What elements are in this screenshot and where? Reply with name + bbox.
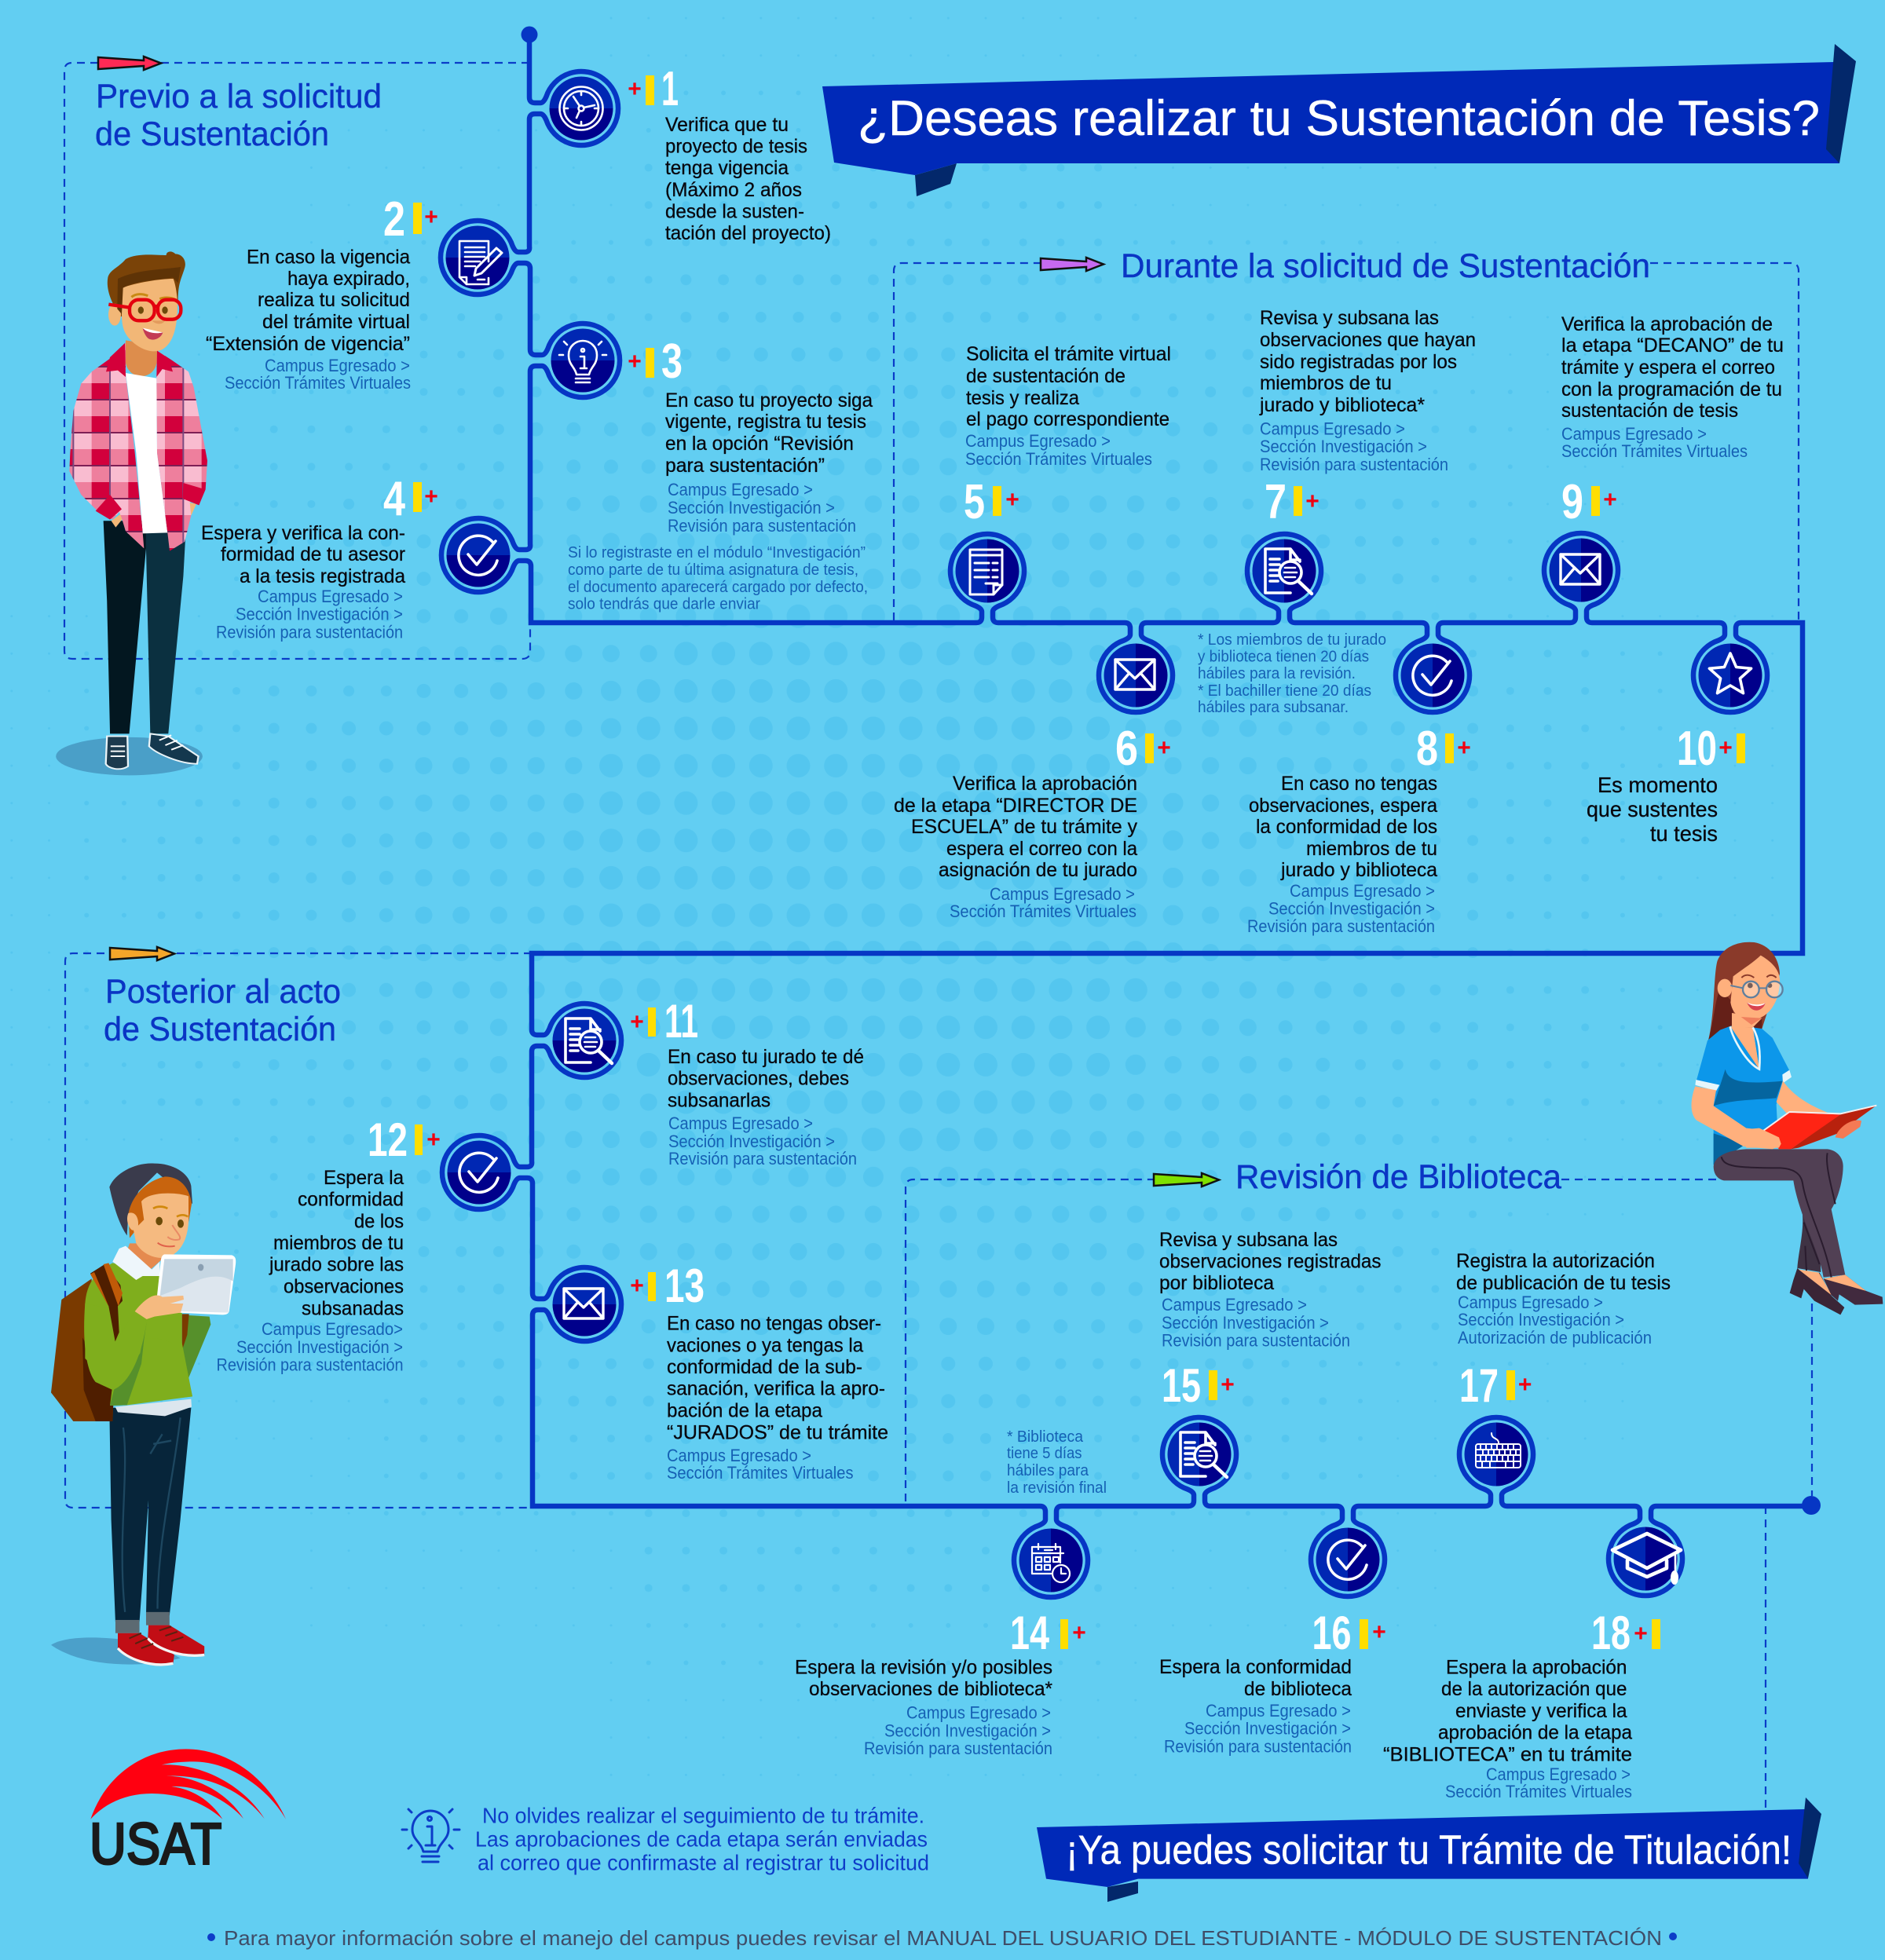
step 11 [553, 995, 864, 1168]
text block: Campus Egresado > [990, 884, 1135, 904]
character: woman reading [1692, 942, 1883, 1315]
reminder text: No olvides realizar el seguimiento de tu trámite. [482, 1803, 924, 1828]
text block: Verifica la aprobación [953, 773, 1137, 795]
text block [1159, 1229, 1381, 1351]
closing banner: ¡Ya puedes solicitar tu Trámite de Titulación! [1066, 1828, 1792, 1874]
number badge: + [1634, 1621, 1648, 1647]
text block: Revisión para sustentación [216, 622, 403, 642]
icon: check [448, 1140, 511, 1205]
note: * El bachiller tiene 20 días [1198, 682, 1371, 700]
icon: clock [550, 77, 613, 140]
arrow: purple [1041, 258, 1104, 271]
text block: Campus Egresado > [1458, 1293, 1603, 1312]
text block: Sección Trámites Virtuales [1445, 1782, 1632, 1801]
note: * Los miembros de tu jurado [1198, 631, 1386, 649]
number badge [628, 62, 679, 116]
icon: graduation cap [1612, 1527, 1681, 1591]
step 7 [1252, 307, 1476, 603]
number badge [1265, 475, 1320, 529]
number badge: 9 [1561, 475, 1583, 529]
text block: En caso no tengas obser- [667, 1313, 881, 1335]
text block: Sección Investigación > [668, 498, 835, 517]
number badge: 2 [383, 192, 405, 247]
title banner [822, 44, 1856, 196]
note: * Biblioteca [1007, 1428, 1084, 1446]
text block: tación del proyecto) [665, 222, 831, 244]
note: tiene 5 días [1007, 1445, 1082, 1462]
text block: Espera y verifica la con- [201, 522, 405, 544]
arrow: green [1154, 1173, 1219, 1187]
text block: Autorización de publicación [1458, 1328, 1652, 1348]
number badge: 7 [1265, 475, 1287, 529]
number badge: + [1305, 488, 1320, 514]
text block: aprobación de la etapa [1438, 1721, 1632, 1743]
text block: miembros de tu [1306, 838, 1437, 860]
note: el documento aparecerá cargado por defecto, [568, 579, 868, 596]
text block: jurado sobre las [269, 1253, 404, 1275]
number badge: 18 [1591, 1607, 1631, 1659]
character: man with tablet [51, 1164, 236, 1665]
number badge: + [630, 1273, 644, 1299]
step 17 [1456, 1250, 1671, 1486]
heading: biblioteca: Revisión de Biblioteca [1235, 1158, 1561, 1196]
text block: realiza tu solicitud [258, 289, 410, 311]
text block: vaciones o ya tengas la [667, 1335, 863, 1357]
number badge: 15 [1162, 1359, 1201, 1412]
number badge: 10 [1677, 722, 1717, 776]
number badge [1010, 1607, 1086, 1659]
text block: Registra la autorización [1456, 1250, 1655, 1272]
text block: desde la susten- [665, 201, 804, 223]
icon: document with magnifier [1167, 1423, 1232, 1486]
note: la revisión final [1007, 1479, 1107, 1497]
reminder text: Las aprobaciones de cada etapa serán enviadas [475, 1827, 928, 1852]
title banner: ¿Deseas realizar tu Sustentación de Tesis? [858, 91, 1820, 146]
text block: Sección Trámites Virtuales [965, 449, 1152, 469]
text block: Sección Investigación > [1162, 1313, 1329, 1333]
text block: bación de la etapa [667, 1399, 822, 1421]
logo: USAT: USAT [90, 1811, 221, 1876]
text block: Campus Egresado > [1290, 881, 1435, 901]
text block: Sección Investigación > [884, 1721, 1051, 1740]
panel: durante dashed frame [894, 263, 1799, 620]
number badge: 8 [1416, 722, 1438, 776]
panel: biblioteca dashed frame [906, 1179, 1812, 1811]
step 12 [217, 1113, 511, 1374]
text block [665, 389, 873, 536]
text block: jurado y biblioteca [1280, 859, 1437, 881]
icon: calendar with clock [1019, 1528, 1082, 1592]
number badge: + [1603, 487, 1617, 513]
text block: la etapa “DECANO” de tu [1561, 335, 1784, 357]
text block: sanación, verifica la apro- [667, 1377, 885, 1399]
step 1 [550, 62, 831, 244]
step 8 [1198, 631, 1471, 936]
text block [206, 247, 411, 393]
number badge: + [424, 484, 438, 510]
number badge: 11 [664, 995, 698, 1048]
text block: Campus Egresado> [262, 1319, 403, 1339]
text block: de la etapa “DIRECTOR DE [894, 795, 1137, 817]
number badge: + [1518, 1372, 1532, 1398]
text block: Campus Egresado > [1561, 424, 1707, 444]
text block: Verifica la aprobación de [1561, 313, 1773, 335]
text block: Revisa y subsana las [1159, 1229, 1338, 1251]
step 3 [551, 328, 873, 612]
text block: Sección Investigación > [668, 1132, 835, 1151]
character: man with plaid shirt [56, 251, 207, 775]
text block: Sección Trámites Virtuales [225, 373, 411, 393]
text block: observaciones que hayan [1260, 329, 1476, 351]
footer note: Para mayor información sobre el manejo del campus puedes revisar el MANUAL DEL USUARIO DEL ESTUDIANTE - MÓDULO DE SUSTENTACIÓN [224, 1926, 1662, 1950]
text block: que sustentes [1587, 797, 1718, 821]
text block: jurado y biblioteca* [1259, 394, 1425, 416]
number badge [1115, 722, 1171, 776]
number badge: + [628, 76, 642, 102]
note: hábiles para [1007, 1462, 1089, 1479]
text block: sido registradas por los [1260, 351, 1457, 373]
text block: la conformidad de los [1256, 816, 1437, 838]
number badge: 17 [1459, 1359, 1499, 1412]
text block: Revisión para sustentación [1247, 916, 1435, 936]
icon: envelope [1104, 644, 1167, 707]
text block: de la autorización que [1441, 1678, 1627, 1700]
text block: formidad de tu asesor [221, 543, 405, 565]
step 16 [1159, 1528, 1386, 1756]
number badge: + [1072, 1620, 1086, 1646]
text block: “Extensión de vigencia” [206, 333, 410, 355]
number badge: 12 [368, 1113, 408, 1166]
text block: Revisión para sustentación [1164, 1737, 1352, 1756]
text block: de sustentación de [966, 365, 1126, 387]
text block [1247, 773, 1437, 936]
text block: Solicita el trámite virtual [966, 343, 1171, 365]
text block: del trámite virtual [262, 311, 410, 333]
text block: Sección Investigación > [1268, 898, 1435, 919]
panel: previo dashed frame [64, 63, 530, 659]
icon: reminder light bulb [402, 1809, 459, 1862]
icon: light bulb [551, 328, 614, 393]
number badge: + [1372, 1619, 1386, 1645]
text block: el pago correspondiente [966, 408, 1169, 430]
step 18 [1383, 1527, 1681, 1801]
heading: previo: de Sustentación [95, 115, 329, 153]
text block: Espera la [324, 1167, 404, 1189]
text block: Revisa y subsana las [1260, 307, 1439, 329]
text block: de los [354, 1211, 404, 1233]
text block: enviaste y verifica la [1455, 1700, 1627, 1722]
text block [668, 1046, 864, 1168]
text block: conformidad de la sub- [667, 1356, 862, 1378]
icon: document with magnifier [1252, 539, 1316, 603]
text block: “BIBLIOTECA” en tu trámite [1383, 1743, 1632, 1765]
text block: para sustentación” [665, 455, 825, 477]
icon: check [1401, 644, 1464, 707]
note: solo tendrás que darle enviar [568, 595, 760, 612]
text block [1259, 307, 1476, 474]
text block: subsanarlas [668, 1090, 770, 1112]
text block: Campus Egresado > [1260, 419, 1405, 438]
number badge: + [1157, 735, 1171, 761]
text block: Sección Trámites Virtuales [950, 901, 1136, 921]
text block: Campus Egresado > [258, 587, 403, 606]
arrow: red [98, 57, 161, 70]
text block: Espera la aprobación [1446, 1657, 1627, 1679]
note: como parte de tu última asignatura de tesis, [568, 561, 858, 579]
text block: de publicación de tu tesis [1456, 1272, 1671, 1294]
note [1007, 1428, 1107, 1497]
text block: Verifica que tu [665, 114, 789, 136]
number badge: 16 [1312, 1607, 1351, 1659]
icon: document with magnifier [553, 1008, 616, 1073]
text block: Campus Egresado > [668, 1113, 813, 1133]
number badge [964, 475, 1019, 529]
number badge [1416, 722, 1471, 776]
step 2 [206, 192, 509, 393]
text block: observaciones de biblioteca* [809, 1678, 1052, 1700]
icon: star [1698, 644, 1762, 707]
text block: Sección Trámites Virtuales [667, 1463, 853, 1483]
number badge: + [424, 204, 438, 230]
text block: Sección Investigación > [236, 1337, 403, 1357]
number badge: 14 [1010, 1607, 1049, 1659]
text block: asignación de tu jurado [939, 859, 1137, 881]
text block: Sección Investigación > [236, 605, 403, 623]
text block: Es momento [1598, 773, 1718, 797]
text block: miembros de tu [273, 1232, 404, 1254]
icon: document and pen [446, 226, 509, 289]
text block: Revisión para sustentación [1162, 1330, 1350, 1351]
text block [1456, 1250, 1671, 1348]
text block: espera el correo con la [946, 838, 1137, 860]
text block [1561, 313, 1784, 461]
text block [665, 114, 831, 244]
number badge: + [630, 1009, 644, 1035]
icon: keyboard [1464, 1423, 1528, 1486]
panel: posterior dashed frame [65, 953, 533, 1508]
text block: proyecto de tesis [665, 135, 807, 157]
icon: document [955, 539, 1019, 603]
step 10 [1587, 644, 1762, 846]
text block: Campus Egresado > [1206, 1701, 1351, 1720]
heading: posterior: de Sustentación [104, 1011, 336, 1048]
number badge [630, 995, 698, 1048]
text block: Sección Investigación > [1184, 1718, 1351, 1739]
text block: En caso tu jurado te dé [668, 1046, 864, 1068]
text block: observaciones registradas [1159, 1250, 1381, 1272]
text block: “JURADOS” de tu trámite [667, 1421, 888, 1443]
text block: tenga vigencia [665, 157, 789, 179]
number badge [1561, 475, 1617, 529]
text block: ESCUELA” de tu trámite y [911, 816, 1137, 838]
text block [217, 1167, 404, 1374]
text block: Sección Investigación > [1458, 1310, 1624, 1329]
text block: En caso no tengas [1281, 773, 1437, 795]
number badge: + [426, 1127, 441, 1153]
text block: (Máximo 2 años [665, 179, 802, 201]
icon: check [446, 523, 511, 587]
heading: posterior: Posterior al acto [105, 973, 341, 1011]
text block: en la opción “Revisión [665, 433, 854, 455]
number badge [383, 472, 438, 526]
heading: previo: Previo a la solicitud [96, 78, 382, 115]
text block [894, 773, 1137, 921]
text block: Revisión para sustentación [864, 1739, 1052, 1758]
step 9 [1549, 313, 1784, 602]
text block: Campus Egresado > [667, 1446, 811, 1465]
text block: En caso la vigencia [247, 247, 410, 269]
text block: de biblioteca [1244, 1678, 1352, 1700]
number badge: 13 [664, 1260, 705, 1312]
text block: Campus Egresado > [965, 431, 1111, 451]
number badge [383, 192, 438, 247]
text block: observaciones [284, 1275, 404, 1297]
timeline connector [441, 27, 1821, 1597]
icon: envelope [1549, 539, 1613, 602]
heading: posterior [104, 973, 341, 1048]
note: Si lo registraste en el módulo “Investigación” [568, 544, 866, 561]
text block [795, 1657, 1052, 1758]
text block: tesis y realiza [966, 387, 1079, 409]
text block [1587, 773, 1718, 846]
heading: durante: Durante la solicitud de Sustentación [1121, 247, 1650, 285]
text block: vigente, registra tu tesis [665, 411, 866, 433]
number badge: + [1005, 487, 1019, 513]
text block: Revisión para sustentación [668, 516, 856, 536]
note: hábiles para la revisión. [1198, 665, 1356, 682]
text block: subsanadas [302, 1297, 404, 1319]
reminder text [475, 1803, 929, 1875]
text block: Espera la conformidad [1159, 1656, 1352, 1678]
number badge: + [1221, 1372, 1235, 1398]
text block: a la tesis registrada [240, 565, 405, 587]
number badge [630, 1260, 705, 1312]
number badge: + [628, 349, 642, 375]
icon: check [1316, 1528, 1379, 1591]
text block [201, 522, 405, 642]
note [568, 544, 868, 612]
heading: previo [95, 78, 382, 153]
text block: Campus Egresado > [906, 1702, 1051, 1723]
number badge [628, 335, 683, 389]
note: y biblioteca tienen 20 días [1198, 649, 1369, 666]
text block: trámite y espera el correo [1561, 357, 1775, 378]
step 5 [955, 343, 1171, 603]
number badge: + [1457, 735, 1471, 761]
text block: por biblioteca [1159, 1272, 1274, 1294]
note [1198, 631, 1386, 716]
text block: Campus Egresado > [1162, 1295, 1307, 1315]
number badge: 3 [661, 335, 683, 389]
text block: Sección Investigación > [1260, 437, 1427, 456]
text block: sustentación de tesis [1561, 400, 1738, 422]
step 13 [553, 1260, 888, 1483]
text block: Sección Trámites Virtuales [1561, 441, 1748, 461]
number badge: + [1718, 735, 1733, 761]
text block: haya expirado, [287, 268, 410, 290]
text block [667, 1313, 888, 1483]
number badge: 4 [383, 472, 405, 526]
text block: Campus Egresado > [1486, 1764, 1631, 1784]
text block: conformidad [298, 1189, 404, 1211]
text block [965, 343, 1171, 469]
text block: Revisión para sustentación [1260, 455, 1448, 474]
step 6 [894, 644, 1171, 921]
text block: con la programación de tu [1561, 378, 1782, 400]
logo: USAT [90, 1749, 286, 1876]
text block: Campus Egresado > [668, 480, 813, 499]
closing banner [1037, 1797, 1821, 1902]
text block: Revisión para sustentación [668, 1149, 857, 1168]
number badge: 1 [661, 62, 679, 116]
text block: observaciones, debes [668, 1068, 849, 1090]
step 15 [1159, 1229, 1381, 1486]
step 4 [201, 472, 511, 642]
text block: Espera la revisión y/o posibles [795, 1657, 1052, 1679]
text block: Campus Egresado > [265, 356, 410, 375]
icon: envelope [553, 1272, 616, 1337]
arrow: orange [110, 947, 174, 960]
number badge: 5 [964, 475, 985, 529]
reminder text: al correo que confirmaste al registrar tu solicitud [478, 1850, 929, 1875]
note: hábiles para subsanar. [1198, 699, 1349, 716]
text block: tu tesis [1650, 821, 1718, 846]
text block [1159, 1656, 1352, 1756]
text block: observaciones, espera [1249, 795, 1437, 817]
step 14 [795, 1428, 1107, 1758]
text block [1383, 1657, 1632, 1801]
text block: Revisión para sustentación [217, 1355, 404, 1374]
text block: miembros de tu [1260, 372, 1392, 394]
text block: En caso tu proyecto siga [665, 389, 873, 411]
number badge: 6 [1115, 722, 1138, 776]
